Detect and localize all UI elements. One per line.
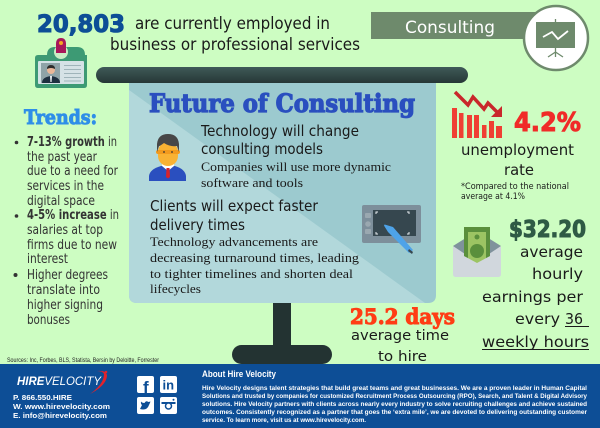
text: technology will change — [200, 122, 391, 190]
banner: consulting: Consulting — [405, 18, 495, 38]
headline statistic: are currently employed in — [135, 14, 330, 34]
stat: unemployment rate: average at 4.1% — [461, 192, 525, 202]
stat: hourly earnings — [482, 217, 589, 351]
logo: hire velocity — [17, 371, 107, 394]
list: trends bullets: translate into — [27, 283, 100, 298]
text: technology will change: software and tools — [201, 175, 303, 190]
heading: trends: Trends: — [24, 105, 97, 129]
heading: future of consulting: Future of Consulting — [149, 89, 415, 118]
text: about hire velocity: service. To learn more, visit us at www.hirevelocity.com. — [202, 417, 366, 424]
list: trends bullets: services in the — [27, 179, 104, 194]
text: about hire velocity: Hire Velocity designs talent strategies that build great teams and great businesses. We are a proven leader in Human Capital — [202, 385, 587, 392]
contact details: E. info@hirevelocity.com — [13, 411, 107, 420]
panel: footer — [0, 364, 600, 428]
stat: days to hire: average time — [351, 328, 449, 344]
text: faster delivery times — [150, 197, 360, 296]
stat: unemployment rate: rate — [504, 161, 534, 179]
text: about hire velocity: Solutions and trusted by companies for customized Recruitment Process Outsourcing (RPO), Search, and Talent & Digital Advisory — [202, 393, 588, 400]
text: faster delivery times: lifecycles — [150, 281, 201, 296]
list: trends bullets: bonuses — [27, 313, 70, 328]
icon: money envelope — [453, 227, 501, 277]
list: trends bullets: due to a need for — [27, 164, 119, 179]
banner: consulting — [371, 12, 541, 39]
text: about hire velocity — [202, 369, 588, 424]
board stand — [232, 303, 332, 364]
text: technology will change: Companies will use more dynamic — [201, 159, 391, 174]
list: trends bullets: 7-13% growth in — [27, 135, 117, 150]
text: faster delivery times: decreasing turnaround times, leading — [150, 250, 360, 265]
stat: days to hire: to hire — [378, 349, 427, 365]
headline statistic: 20,803 — [37, 10, 125, 38]
icon: falling bar chart — [452, 92, 502, 138]
contact details: W. www.hirevelocity.com — [13, 402, 110, 411]
stat: hourly earnings: 36 — [565, 310, 583, 328]
icon: drawing tablet — [362, 205, 421, 254]
text: about hire velocity: solutions. Hire Velocity partners with clients across nearly every industry to solve recruiting challenges and achieve sustained — [202, 401, 587, 408]
headline statistic: business or professional services — [110, 35, 360, 55]
text: technology will change: Technology will change — [200, 122, 359, 140]
bar: board top rail — [96, 67, 468, 83]
list: trends bullets: firms due to new — [27, 238, 117, 253]
stat: hourly earnings: weekly hours — [482, 333, 589, 351]
contact details: P. 866.550.HIRE — [13, 393, 72, 402]
icon: presentation chart — [524, 6, 588, 70]
stat: hourly earnings: earnings per — [482, 288, 584, 306]
list: trends bullets: the past year — [27, 150, 98, 165]
list: trends bullets — [14, 135, 119, 328]
icon: businessman — [149, 134, 186, 181]
list: trends bullets: interest — [27, 252, 68, 267]
text: faster delivery times: Clients will expect faster — [150, 197, 319, 215]
text: about hire velocity: outcomes. Consistently recognized as a partner that goes the ‘extra mile’, we are devoted to delivering outstanding customer — [202, 409, 588, 416]
stat: hourly earnings: $32.20 — [509, 217, 586, 243]
stat: unemployment rate: unemployment — [461, 141, 574, 159]
logo: hire velocity: HIREVELOCITY — [17, 374, 102, 388]
stat: hourly earnings: hourly — [532, 265, 583, 283]
text: faster delivery times: delivery times — [150, 216, 245, 234]
contact details — [13, 393, 110, 420]
stat: unemployment rate: *Compared to the national — [461, 182, 569, 192]
stat: hourly earnings: every — [515, 310, 560, 328]
text: faster delivery times: to tighter timelines and shorten deal — [150, 266, 353, 281]
stat: unemployment rate — [461, 108, 581, 202]
sources note: Sources: Inc, Forbes, BLS, Statista, Bersin by Deloitte, Forrester — [7, 358, 159, 364]
icon: id badge — [35, 38, 87, 88]
icons: social media — [137, 376, 177, 414]
stat: days to hire: 25.2 days — [350, 304, 455, 329]
headline statistic — [37, 10, 360, 55]
list: trends bullets: digital space — [27, 194, 95, 209]
icons: social media: f — [143, 378, 149, 397]
text: technology will change: consulting models — [201, 140, 323, 158]
panel: future of consulting board — [129, 83, 436, 303]
list: trends bullets: higher signing — [27, 298, 103, 313]
stat: days to hire — [350, 304, 455, 365]
icons: social media: in — [162, 378, 174, 392]
text: faster delivery times: Technology advancements are — [150, 234, 318, 249]
list: trends bullets: 4-5% increase in — [27, 208, 119, 223]
stat: unemployment rate: 4.2% — [514, 108, 581, 138]
list: trends bullets: salaries at top — [27, 223, 103, 238]
stat: hourly earnings: average — [520, 243, 583, 261]
text: about hire velocity: About Hire Velocity — [202, 369, 276, 379]
list: trends bullets: Higher degrees — [27, 268, 108, 283]
